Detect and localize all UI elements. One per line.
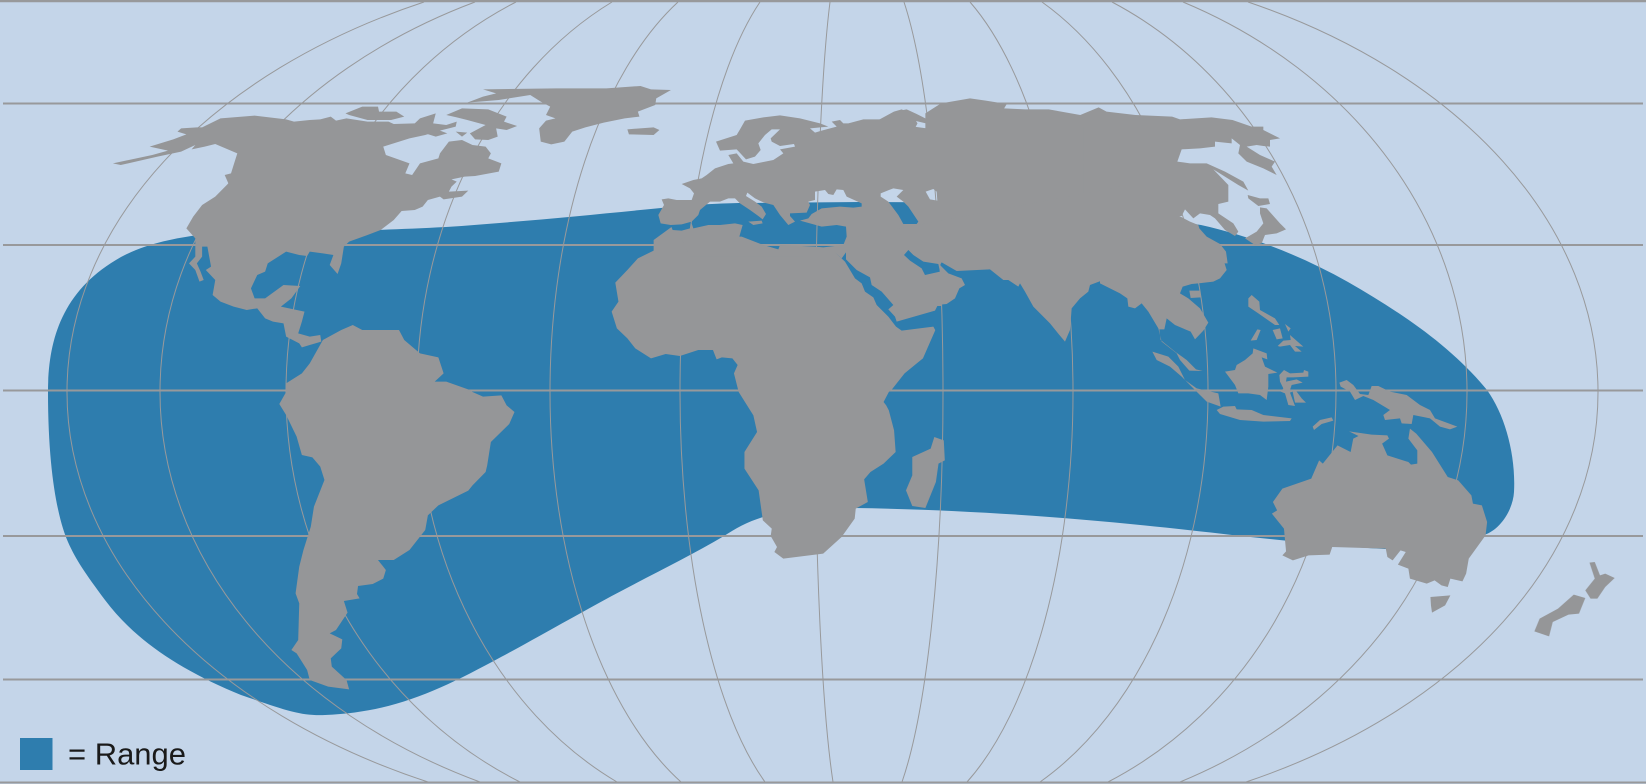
region: Far East coast: [1120, 126, 1286, 264]
legend: [20, 736, 186, 772]
continents: Eurasia and Africa: [612, 98, 1286, 559]
islands: Indonesia, Philippines and New Guinea: [1152, 295, 1457, 430]
region: Southeast Asia: [1100, 263, 1227, 371]
continent: South America: [279, 325, 514, 689]
continent: Australia: [1272, 429, 1487, 613]
range area: [48, 202, 1514, 715]
region: Siberia north coast: [880, 98, 1252, 221]
island: Iceland: [627, 127, 659, 135]
continent: North America: [113, 107, 517, 347]
legend label: = Range: [68, 736, 186, 772]
region: Europe: [658, 109, 926, 238]
island: Madagascar: [906, 437, 945, 508]
islands: New Zealand: [1534, 562, 1615, 636]
legend swatch: [20, 738, 52, 770]
region: Africa: [612, 227, 945, 559]
region: Arabia and India: [916, 233, 1100, 342]
island: Greenland: [467, 86, 671, 144]
